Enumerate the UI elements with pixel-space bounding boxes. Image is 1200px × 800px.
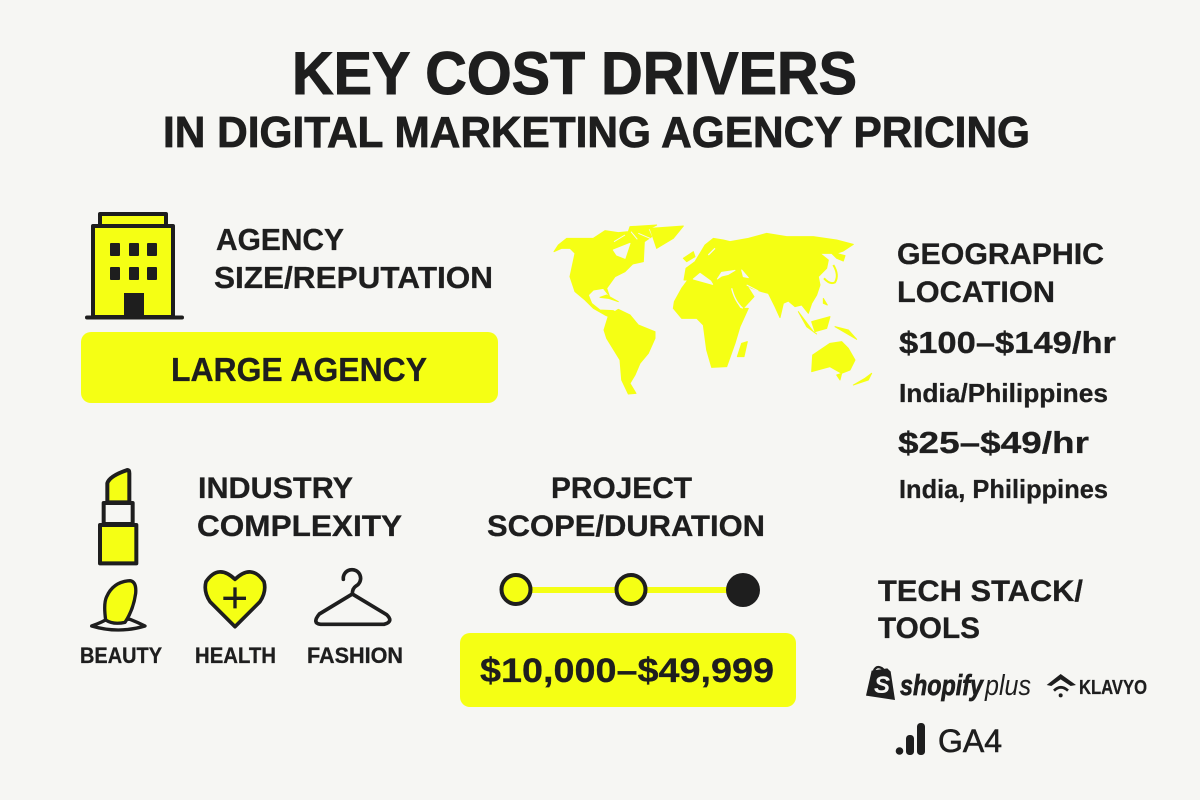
heading: industry complexity	[197, 472, 402, 543]
icon: office building	[87, 214, 182, 318]
heading: tech stack/tools: TECH STACK/	[878, 575, 1084, 608]
timeline	[502, 573, 760, 607]
panel: geographic location	[897, 238, 1116, 504]
panel: geographic location: LOCATION	[897, 276, 1055, 309]
callout: budget range: $10,000–$49,999	[480, 652, 774, 690]
heading: agency size/reputation: AGENCY	[216, 222, 344, 257]
panel: geographic location: GEOGRAPHIC	[897, 238, 1104, 271]
panel: agency size/reputation	[81, 214, 498, 403]
title: KEY COST DRIVERS	[292, 40, 857, 107]
eurasia	[683, 233, 853, 318]
logo: shopify plus: S	[874, 672, 890, 699]
callout: large agency: LARGE AGENCY	[171, 351, 427, 388]
logo: shopify plus	[866, 667, 1031, 702]
heading: project scope/duration: SCOPE/DURATION	[487, 510, 765, 543]
logo: ga4: GA4	[938, 723, 1002, 759]
logo: klavyo: KLAVYO	[1079, 677, 1147, 699]
icon: fashion hanger	[316, 570, 390, 624]
logo: klavyo	[1047, 674, 1147, 699]
heading: agency size/reputation	[214, 222, 493, 295]
heading: tech stack/tools: TOOLS	[878, 612, 980, 645]
logo: shopify plus: shopify	[900, 670, 984, 702]
panel: geographic location: $25–$49/hr	[898, 425, 1089, 460]
panel: project scope/duration	[460, 472, 796, 707]
title	[163, 40, 1030, 157]
callout: large agency	[81, 332, 498, 403]
label: health: HEALTH	[195, 643, 276, 668]
label: fashion: FASHION	[307, 643, 403, 668]
world map	[554, 225, 872, 394]
icon: beauty sponge	[92, 581, 145, 630]
south america, africa, islands	[604, 278, 872, 394]
heading: industry complexity: COMPLEXITY	[197, 510, 402, 543]
logo: ga4	[896, 723, 1002, 759]
logo: shopify plus: plus	[984, 670, 1031, 702]
heading: tech stack/tools	[878, 575, 1084, 645]
callout: budget range	[460, 633, 796, 707]
icon: lipstick	[100, 470, 136, 563]
panel: geographic location: India/Philippines	[899, 378, 1108, 408]
heading: agency size/reputation: SIZE/REPUTATION	[214, 260, 493, 295]
panel: geographic location: $100–$149/hr	[899, 325, 1116, 360]
title: IN DIGITAL MARKETING AGENCY PRICING	[163, 108, 1030, 157]
heading: project scope/duration: PROJECT	[551, 472, 692, 505]
panel: tech stack/tools	[866, 575, 1147, 759]
panel: industry complexity	[80, 470, 403, 668]
heading: project scope/duration	[487, 472, 765, 543]
heading: industry complexity: INDUSTRY	[198, 472, 353, 505]
label: beauty: BEAUTY	[80, 643, 162, 668]
north america	[554, 225, 683, 320]
icon: health heart	[205, 572, 265, 627]
panel: geographic location: India, Philippines	[899, 474, 1108, 504]
